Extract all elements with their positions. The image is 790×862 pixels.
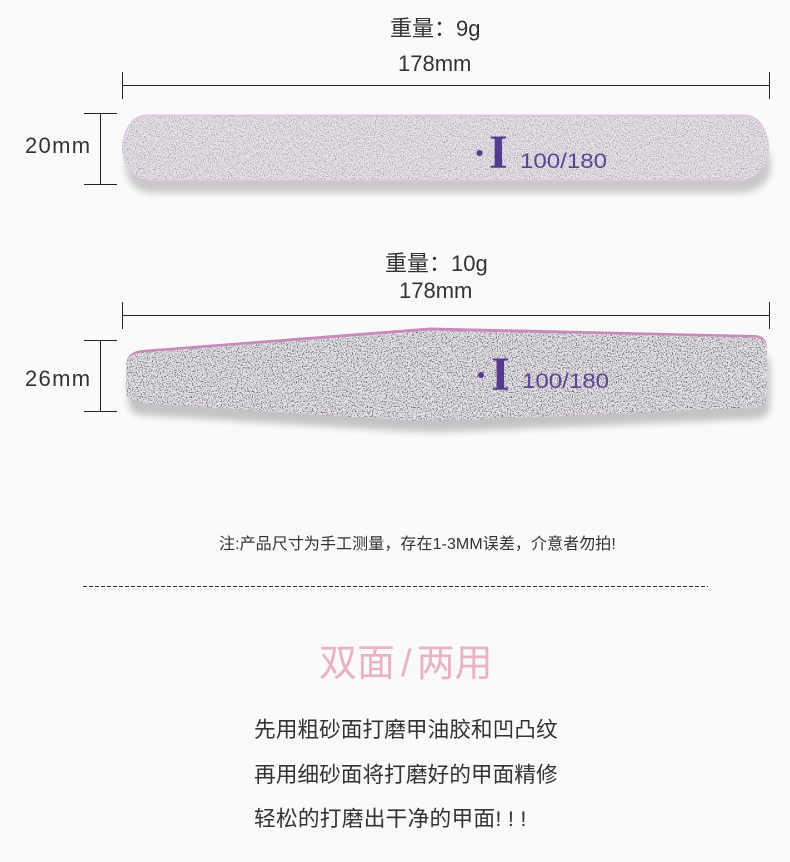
dimension: file 1 height 20mm [84,113,117,185]
line 2: 再用细砂面将打磨好的甲面精修 [254,762,558,787]
logo mark [478,348,510,401]
grit label: 100/180 [520,150,607,173]
section heading: 双面/两用 [319,643,493,685]
dimension: file 2 width 178mm [122,302,770,329]
dimension: file 2 height 26mm [84,340,117,412]
logo mark [476,126,508,179]
logo mark: I [489,126,508,179]
measurement note: 注:产品尺寸为手工测量，存在1-3MM误差，介意者勿拍! [219,536,616,553]
length label 2: 178mm [399,278,472,303]
line 1: 先用粗砂面打磨甲油胶和凹凸纹 [254,717,558,742]
description text [254,717,558,831]
logo mark: I [491,348,510,401]
line 3: 轻松的打磨出干净的甲面! ! ! [254,806,527,831]
nail file 2: diamond [126,328,770,432]
height label 1: 20mm [25,133,91,158]
weight label 1: 重量：9g [390,16,480,41]
nail file 1: straight [122,114,771,193]
dashed divider [83,586,708,588]
dimension: file 1 width 178mm [122,72,770,99]
height label 2: 26mm [25,366,91,391]
length label 1: 178mm [398,51,471,76]
grit label: 100/180 [522,370,609,393]
weight label 2: 重量：10g [385,251,488,276]
